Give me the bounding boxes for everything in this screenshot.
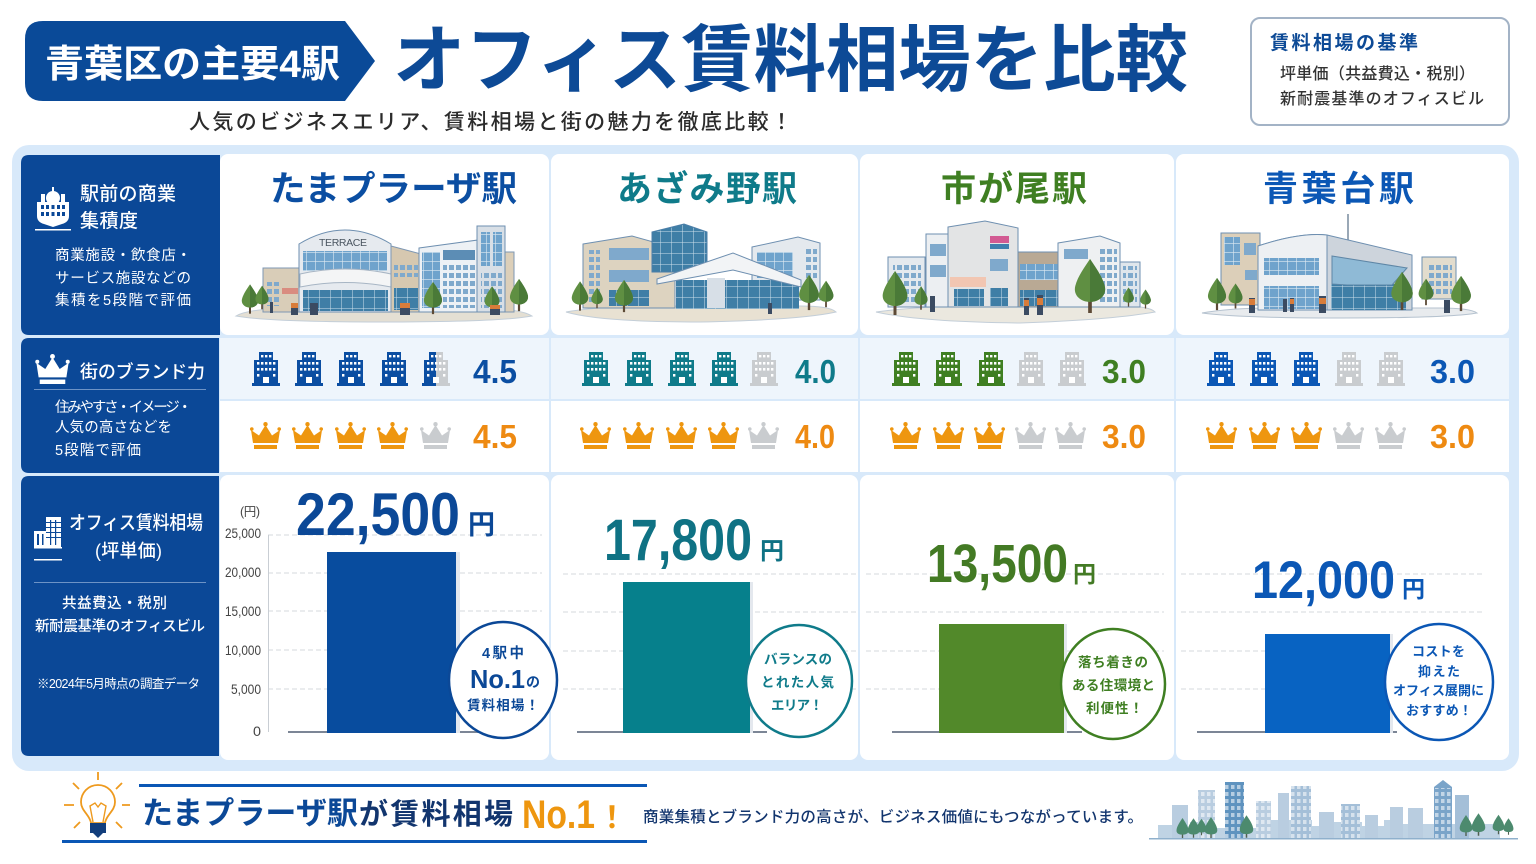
bar: たまプラーザ駅 22,500円: [288, 481, 495, 733]
chart axis: yen per tsubo: 20,000: [225, 564, 261, 580]
panel: commercial concentration label: [21, 155, 220, 335]
bar: 青葉台駅 12,000円: 円: [1402, 576, 1425, 602]
rating: 青葉台駅 commercial 3.0: [1207, 352, 1475, 390]
rating: たまプラーザ駅 commercial 4.5: [252, 352, 516, 386]
panel: brand power label: 人気の高さなどを: [55, 419, 172, 436]
callout: 市が尾駅: 落ち着きの: [1078, 655, 1148, 670]
panel: office rent label: [21, 476, 219, 756]
panel: office rent label: 共益費込・税別: [62, 595, 167, 612]
rating: 市が尾駅 commercial 3.0: 3.0: [1102, 353, 1146, 390]
callout: たまプラーザ駅 No.1: 4駅中: [482, 645, 524, 662]
callout: あざみ野駅: [746, 625, 852, 737]
rating: あざみ野駅 commercial 4.0: [582, 352, 836, 390]
station name: 青葉台駅: 青葉台駅: [1263, 170, 1414, 209]
icon: white crown: [35, 354, 70, 384]
panel: brand power label: 街のブランド力: [80, 361, 205, 382]
callout: あざみ野駅: とれた人気: [761, 674, 834, 690]
callout: たまプラーザ駅 No.1: [449, 622, 557, 738]
rating: あざみ野駅 brand 4.0: 4.0: [795, 418, 835, 455]
header badge: 青葉区の主要4駅: 青葉区の主要4駅: [45, 44, 340, 86]
callout: 市が尾駅: [1061, 629, 1165, 739]
panel: commercial concentration label: 駅前の商業: [80, 183, 176, 205]
main comparison panel: [12, 145, 1519, 771]
callout: 青葉台駅: コストを: [1412, 644, 1465, 659]
rating: たまプラーザ駅 commercial 4.5: 4.5: [473, 353, 517, 390]
panel: commercial concentration label: 集積を5段階で評価: [55, 292, 191, 309]
rating: 市が尾駅 brand 3.0: [890, 418, 1146, 455]
criteria note box: 賃料相場の基準: [1270, 32, 1418, 54]
bar: 市が尾駅 13,500円: 円: [1073, 561, 1096, 587]
station name: あざみ野駅: あざみ野駅: [617, 169, 797, 209]
panel: brand power label: [21, 338, 219, 473]
chart axis: yen per tsubo: (円): [240, 505, 260, 519]
chart axis: yen per tsubo: 25,000: [225, 525, 261, 541]
panel: brand power label: 住みやすさ・イメージ・: [55, 399, 192, 416]
rating: 青葉台駅 brand 3.0: [1206, 418, 1475, 455]
rating: たまプラーザ駅 brand 4.5: [250, 418, 517, 455]
criteria note box: [1251, 18, 1509, 125]
icon: commercial buildings: [35, 187, 71, 230]
bar: 青葉台駅 12,000円: 12,000: [1252, 551, 1395, 610]
header badge: 青葉区の主要4駅: [25, 21, 375, 101]
conclusion banner: たまプラーザ駅: [142, 796, 358, 831]
column cards: [220, 154, 1509, 760]
chart axis: yen per tsubo: [225, 505, 269, 739]
panel: office rent label: オフィス賃料相場: [69, 512, 203, 534]
bar: 市が尾駅 13,500円: [892, 534, 1096, 733]
chart axis: yen per tsubo: 15,000: [225, 603, 261, 619]
callout: たまプラーザ駅 No.1: 賃料相場！: [467, 697, 539, 713]
subtitle: 人気のビジネスエリア、賃料相場と街の魅力を徹底比較！: [189, 111, 792, 134]
icon: city skyline: [1149, 780, 1518, 840]
title: オフィス賃料相場を比較: [393, 20, 1188, 101]
criteria note box: 新耐震基準のオフィスビル: [1280, 90, 1484, 108]
panel: brand power label: 5段階で評価: [55, 442, 141, 459]
callout: 青葉台駅: [1385, 624, 1493, 740]
panel: office rent label: ※2024年5月時点の調査データ: [37, 676, 200, 691]
chart axis: yen per tsubo: 10,000: [225, 642, 261, 658]
panel: commercial concentration label: 集積度: [80, 210, 138, 232]
chart gridlines: [268, 535, 1485, 689]
bar: たまプラーザ駅 22,500円: 22,500: [296, 481, 460, 548]
illustration: たまプラーザ駅 building: [236, 226, 532, 322]
callout: あざみ野駅: エリア！: [771, 698, 823, 713]
bar: あざみ野駅 17,800円: 円: [760, 538, 784, 565]
conclusion banner: が賃料相場: [359, 797, 513, 831]
illustration: たまプラーザ駅 building: TERRACE: [319, 237, 367, 249]
bar: あざみ野駅 17,800円: 17,800: [604, 508, 752, 573]
bar: 青葉台駅 12,000円: [1197, 551, 1425, 733]
conclusion banner: No.1: [522, 793, 595, 837]
illustration: 青葉台駅 building: [1202, 214, 1477, 318]
callout: 市が尾駅: ある住環境と: [1072, 677, 1155, 693]
conclusion banner: ！: [597, 802, 627, 835]
callout: たまプラーザ駅 No.1: の: [526, 674, 540, 690]
callout: たまプラーザ駅 No.1: No.1: [470, 664, 525, 694]
illustration: 市が尾駅 building: [876, 221, 1155, 323]
callout: 青葉台駅: 抑えた: [1418, 664, 1460, 679]
bar: 市が尾駅 13,500円: 13,500: [927, 534, 1068, 594]
conclusion banner: [62, 784, 647, 843]
callout: 青葉台駅: オフィス展開に: [1393, 683, 1484, 698]
callout: 青葉台駅: おすすめ！: [1406, 703, 1472, 718]
station name: 市が尾駅: 市が尾駅: [941, 170, 1087, 209]
rating: 青葉台駅 commercial 3.0: 3.0: [1430, 353, 1475, 390]
bar: たまプラーザ駅 22,500円: 円: [468, 510, 495, 540]
station name: たまプラーザ駅: たまプラーザ駅: [270, 170, 517, 209]
panel: office rent label: 新耐震基準のオフィスビル: [35, 618, 205, 635]
rating: 市が尾駅 commercial 3.0: [892, 352, 1146, 390]
bar: あざみ野駅 17,800円: [577, 508, 784, 733]
callout: 市が尾駅: 利便性！: [1086, 700, 1143, 716]
chart axis: yen per tsubo: 5,000: [231, 681, 261, 697]
criteria note box: 坪単価（共益費込・税別）: [1280, 65, 1475, 83]
illustration: あざみ野駅 building: [566, 224, 836, 322]
rating: あざみ野駅 brand 4.0: [580, 418, 835, 455]
rating: 青葉台駅 brand 3.0: 3.0: [1430, 418, 1475, 455]
rating: あざみ野駅 commercial 4.0: 4.0: [795, 353, 836, 390]
panel: office rent label: (坪単価): [95, 541, 162, 561]
panel: commercial concentration label: サービス施設などの: [55, 270, 191, 287]
rating: たまプラーザ駅 brand 4.5: 4.5: [473, 418, 517, 455]
icon: light bulb: [64, 772, 130, 838]
rating: 市が尾駅 brand 3.0: 3.0: [1102, 418, 1146, 455]
chart axis: yen per tsubo: 0: [253, 723, 261, 739]
icon: office tower: [34, 517, 62, 560]
callout: あざみ野駅: バランスの: [764, 652, 832, 667]
conclusion text: 商業集積とブランド力の高さが、ビジネス価値にもつながっています。: [643, 807, 1143, 826]
panel: commercial concentration label: 商業施設・飲食店・: [55, 247, 191, 264]
